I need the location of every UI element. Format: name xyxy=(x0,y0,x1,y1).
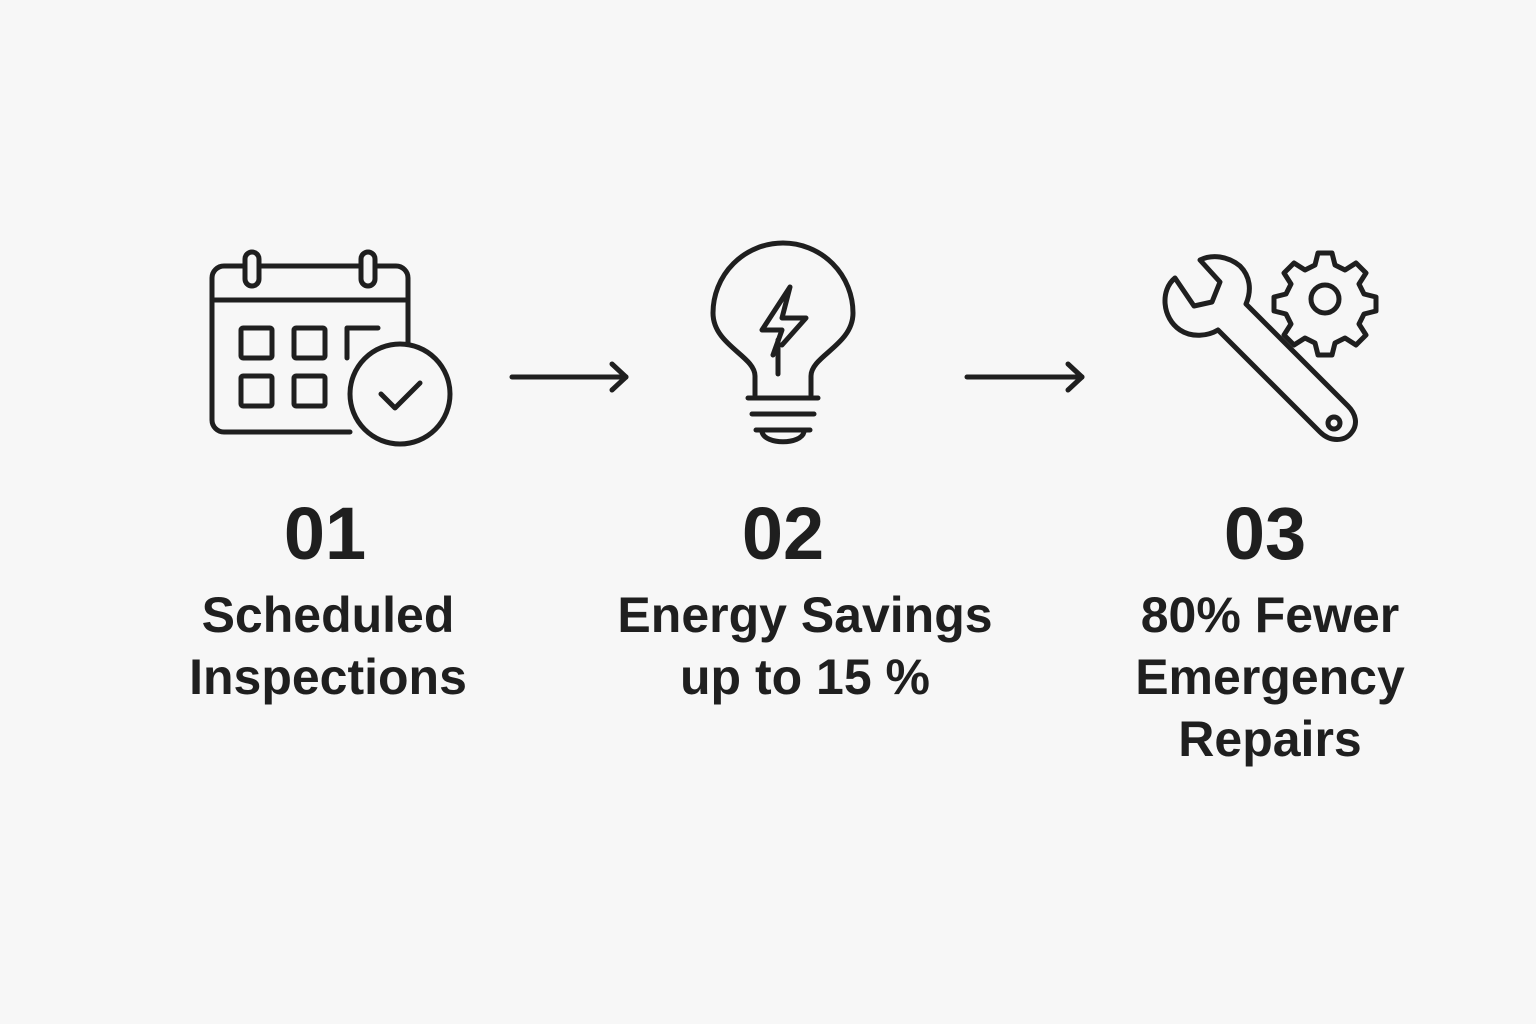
step 2 label: Energy Savings xyxy=(617,587,993,643)
step 2 label xyxy=(617,587,993,705)
arrow 1 xyxy=(512,364,626,390)
arrow 2 xyxy=(967,364,1082,390)
step 1 label: Scheduled xyxy=(202,587,454,643)
step 1 label xyxy=(189,587,467,705)
step 1 label: Inspections xyxy=(189,649,467,705)
step 2 label: up to 15 % xyxy=(680,649,930,705)
icon: calendar with check xyxy=(212,252,450,444)
step 3 label: Repairs xyxy=(1178,711,1362,767)
step 3 label: 80% Fewer xyxy=(1141,587,1399,643)
step 3 number: 03 xyxy=(1224,492,1306,575)
icon: wrench and gear xyxy=(1165,253,1376,440)
step 2 number: 02 xyxy=(742,492,824,575)
step 1 number: 01 xyxy=(284,492,366,575)
icon: light bulb xyxy=(713,243,853,442)
step 3 label xyxy=(1135,587,1405,767)
step 3 label: Emergency xyxy=(1135,649,1405,705)
